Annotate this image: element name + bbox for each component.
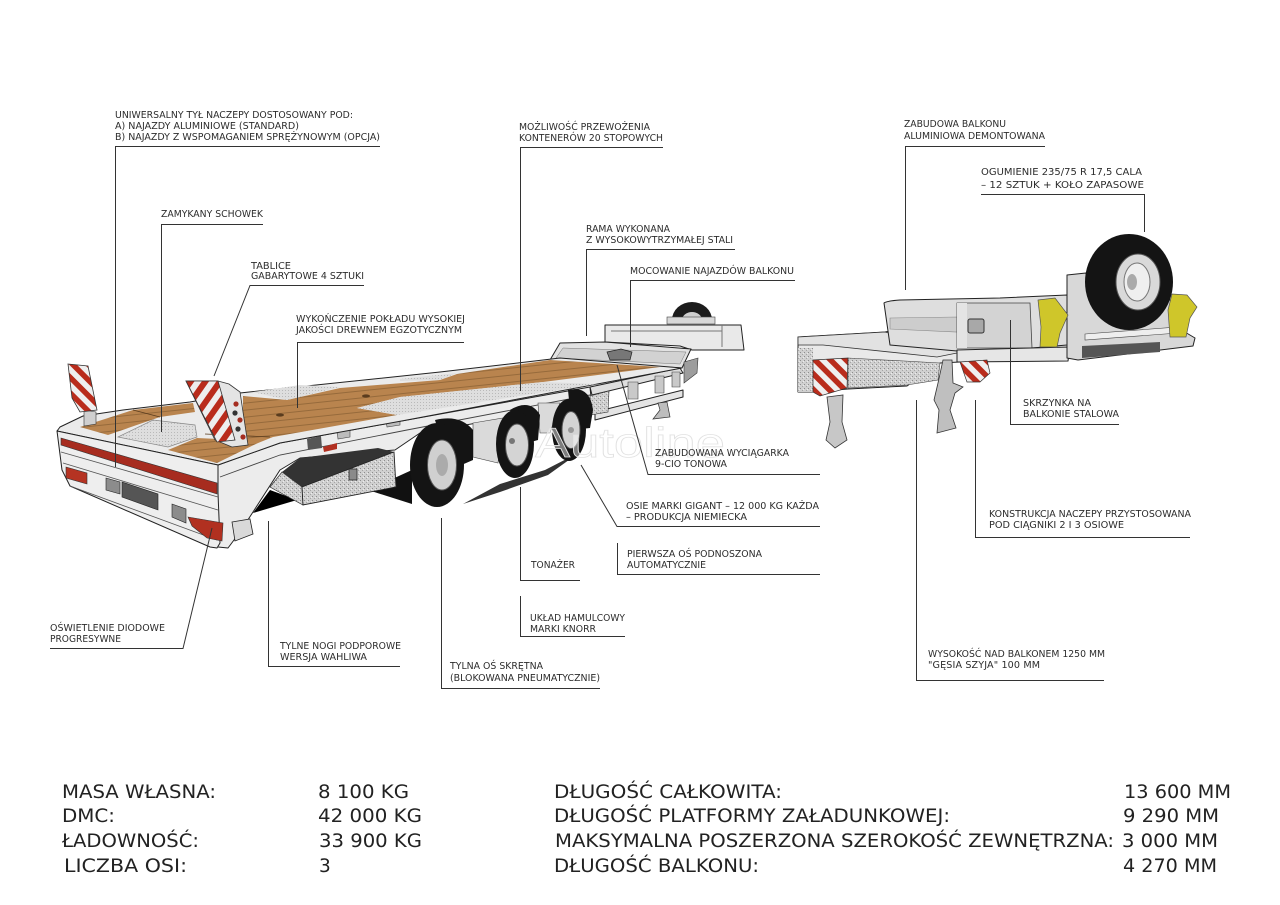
far-side support wheel	[667, 302, 715, 324]
callout: support legs: TYLNE NOGI PODPOROWE	[279, 641, 401, 652]
front support leg	[826, 395, 847, 448]
locker hatch	[118, 420, 197, 447]
specifications: dimensions: 3 000 MM	[1122, 831, 1218, 852]
box side face	[270, 472, 303, 505]
specifications: weights: 8 100 KG	[318, 782, 409, 803]
callout: marker boards: GABARYTOWE 4 SZTUKI	[251, 271, 364, 282]
callout: support legs	[268, 521, 401, 666]
left stippled end	[798, 348, 813, 392]
callout: tyres	[981, 167, 1144, 232]
left warning board	[68, 364, 97, 426]
callout: axles	[581, 465, 820, 526]
callout: brakes: UKŁAD HAMULCOWY	[530, 613, 625, 624]
specifications: dimensions: MAKSYMALNA POSZERZONA SZEROKOŚĆ ZEWNĘTRZNA:	[555, 830, 1114, 852]
red reflective stripe	[61, 438, 217, 494]
callout: brakes: MARKI KNORR	[530, 624, 596, 635]
marker lamps	[307, 436, 322, 450]
dark shadow behind the box	[368, 470, 412, 504]
callout: lockable storage: ZAMYKANY SCHOWEK	[161, 209, 264, 220]
callout: LED lights	[50, 528, 212, 648]
callout: height: "GĘSIA SZYJA" 100 MM	[928, 660, 1040, 671]
callout: tonnage: TONAŻER	[530, 558, 575, 571]
callout: ramp mounting	[630, 264, 795, 347]
callout: steel box	[1010, 320, 1119, 424]
rear support	[232, 519, 253, 541]
specifications: weights: ŁADOWNOŚĆ:	[61, 830, 199, 852]
callout: axles: OSIE MARKI GIGANT – 12 000 KG KAŻDA	[626, 499, 819, 512]
forward support leg	[653, 402, 670, 419]
specifications: dimensions: DŁUGOŚĆ BALKONU:	[554, 855, 759, 877]
callout: LED lights: PROGRESYWNE	[50, 634, 121, 645]
callout: brakes	[520, 596, 625, 636]
callout: steered axle: TYLNA OŚ SKRĘTNA	[449, 659, 543, 672]
callout: support legs: WERSJA WAHLIWA	[280, 652, 367, 663]
specifications: weights	[61, 782, 422, 877]
callout: first axle lift	[618, 543, 820, 574]
callout: ramp mounting: MOCOWANIE NAJAZDÓW BALKONU	[630, 264, 794, 277]
callout: LED lights: OŚWIETLENIE DIODOWE	[50, 621, 165, 634]
callout: marker boards	[214, 261, 364, 376]
callout: containers: MOŻLIWOŚĆ PRZEWOŻENIA	[519, 120, 650, 133]
specifications: dimensions	[554, 781, 1231, 877]
callout: height	[916, 400, 1105, 680]
number plate block	[122, 482, 158, 510]
front end bracket	[684, 358, 698, 383]
callout: steel box: SKRZYNKA NA	[1023, 398, 1091, 409]
hanger brackets	[628, 372, 680, 399]
wooden deck planks	[243, 360, 660, 445]
callout: universal rear: A) NAJAZDY ALUMINIOWE (STANDARD)	[115, 121, 299, 132]
callout: construction: POD CIĄGNIKI 2 I 3 OSIOWE	[989, 520, 1124, 531]
frame and rear overhang side	[218, 358, 698, 548]
aluminium balcony wall	[884, 295, 1067, 351]
callout: winch	[617, 365, 820, 474]
tread plate panel	[357, 382, 597, 415]
callout: universal rear: UNIWERSALNY TYŁ NACZEPY DOSTOSOWANY POD:	[115, 110, 353, 121]
frame beam	[798, 332, 962, 357]
callout: balcony body: ZABUDOWA BALKONU	[904, 119, 1006, 130]
callout: containers: KONTENERÓW 20 STOPOWYCH	[519, 131, 663, 144]
callout: construction	[976, 400, 1191, 538]
callout: lockable storage	[161, 209, 264, 432]
specifications: dimensions: 9 290 MM	[1123, 806, 1219, 827]
specifications: dimensions: 4 270 MM	[1123, 856, 1217, 877]
illustration: main low-loader trailer	[57, 302, 744, 548]
callout: steered axle: (BLOKOWANA PNEUMATYCZNIE)	[450, 673, 600, 684]
watermark: Autoline	[535, 419, 725, 466]
illustration: detached gooseneck section	[798, 234, 1197, 448]
specifications: dimensions: DŁUGOŚĆ CAŁKOWITA:	[554, 781, 782, 803]
callout: steel box: BALKONIE STALOWA	[1023, 409, 1119, 420]
callout: axles: – PRODUKCJA NIEMIECKA	[626, 512, 747, 523]
forward lower rail	[595, 390, 683, 420]
specifications: weights: MASA WŁASNA:	[62, 782, 216, 803]
callout: first axle lift: AUTOMATYCZNIE	[627, 560, 706, 571]
callout: tyres: OGUMIENIE 235/75 R 17,5 CALA	[981, 167, 1142, 178]
callout: containers	[519, 120, 663, 391]
second axle wheel	[496, 410, 534, 478]
callout: tonnage	[520, 487, 580, 580]
specifications: dimensions: DŁUGOŚĆ PLATFORMY ZAŁADUNKOWEJ:	[554, 805, 950, 827]
deck surface	[57, 358, 682, 465]
rear support leg	[934, 360, 963, 433]
spare tyre	[1085, 234, 1173, 330]
left tail light	[66, 467, 87, 484]
front red/white chevron plate	[813, 358, 848, 396]
rear axle wheel	[410, 423, 464, 507]
callout: height: WYSOKOŚĆ NAD BALKONEM 1250 MM	[928, 647, 1105, 660]
callout: marker boards: TABLICE	[250, 261, 291, 272]
specifications: weights: DMC:	[62, 806, 115, 827]
callout: winch: 9-CIO TONOWA	[655, 459, 727, 470]
rear end face	[57, 431, 253, 548]
rear deck and frame body	[798, 296, 1067, 392]
specifications: weights: 33 900 KG	[319, 831, 422, 852]
box front face	[302, 452, 396, 505]
rear wooden deck right	[168, 437, 270, 463]
lower frame strip	[957, 347, 1070, 362]
callout: construction: KONSTRUKCJA NACZEPY PRZYSTOSOWANA	[989, 509, 1191, 520]
specifications: weights: 42 000 KG	[318, 806, 422, 827]
callout: wooden deck: WYKOŃCZENIE POKŁADU WYSOKIEJ	[296, 312, 465, 325]
third axle wheel	[552, 399, 586, 461]
pull-out toolbox	[253, 448, 412, 513]
wheel arches	[435, 389, 593, 470]
wood seams and holes	[133, 410, 270, 437]
right tail light	[188, 517, 223, 541]
callout: tyres: – 12 SZTUK + KOŁO ZAPASOWE	[981, 180, 1144, 191]
specifications: weights: LICZBA OSI:	[64, 856, 187, 877]
gooseneck balcony	[550, 325, 744, 368]
left yellow wedge	[1038, 298, 1068, 347]
box interior	[282, 448, 394, 487]
forward upper rail	[590, 368, 683, 395]
right mechanics block	[1067, 273, 1195, 360]
callout: steered axle	[442, 518, 600, 688]
black shadow under the box	[253, 490, 297, 513]
callout: universal rear: B) NAJAZDY Z WSPOMAGANIEM SPRĘŻYNOWYM (OPCJA)	[115, 130, 380, 143]
callout: wooden deck: JAKOŚCI DREWNEM EGZOTYCZNYM	[295, 323, 462, 336]
rear red/white chevron plate	[960, 360, 990, 382]
front tread strip	[253, 373, 457, 400]
callout: wooden deck	[295, 312, 465, 408]
callout: balcony body: ALUMINIOWA DEMONTOWANA	[904, 131, 1045, 142]
callout: universal rear	[115, 110, 380, 467]
panel between axles	[473, 403, 560, 463]
balcony toolbox	[957, 303, 1032, 348]
callout: winch: ZABUDOWANA WYCIĄGARKA	[655, 448, 789, 459]
right warning board with lamps	[186, 381, 248, 447]
rear wooden deck left	[80, 403, 195, 435]
side frame panel	[848, 358, 940, 388]
specifications: dimensions: 13 600 MM	[1124, 782, 1231, 803]
right yellow wedge	[1168, 294, 1197, 337]
callout: frame steel: RAMA WYKONANA	[586, 224, 670, 235]
callout: frame steel: Z WYSOKOWYTRZYMAŁEJ STALI	[586, 235, 733, 246]
callout: first axle lift: PIERWSZA OŚ PODNOSZONA	[627, 547, 762, 560]
callout: balcony body	[904, 119, 1045, 290]
specifications: weights: 3	[319, 856, 331, 877]
callout: frame steel	[586, 224, 735, 336]
stippled box on rail	[590, 391, 609, 415]
ground shadow	[463, 452, 580, 504]
